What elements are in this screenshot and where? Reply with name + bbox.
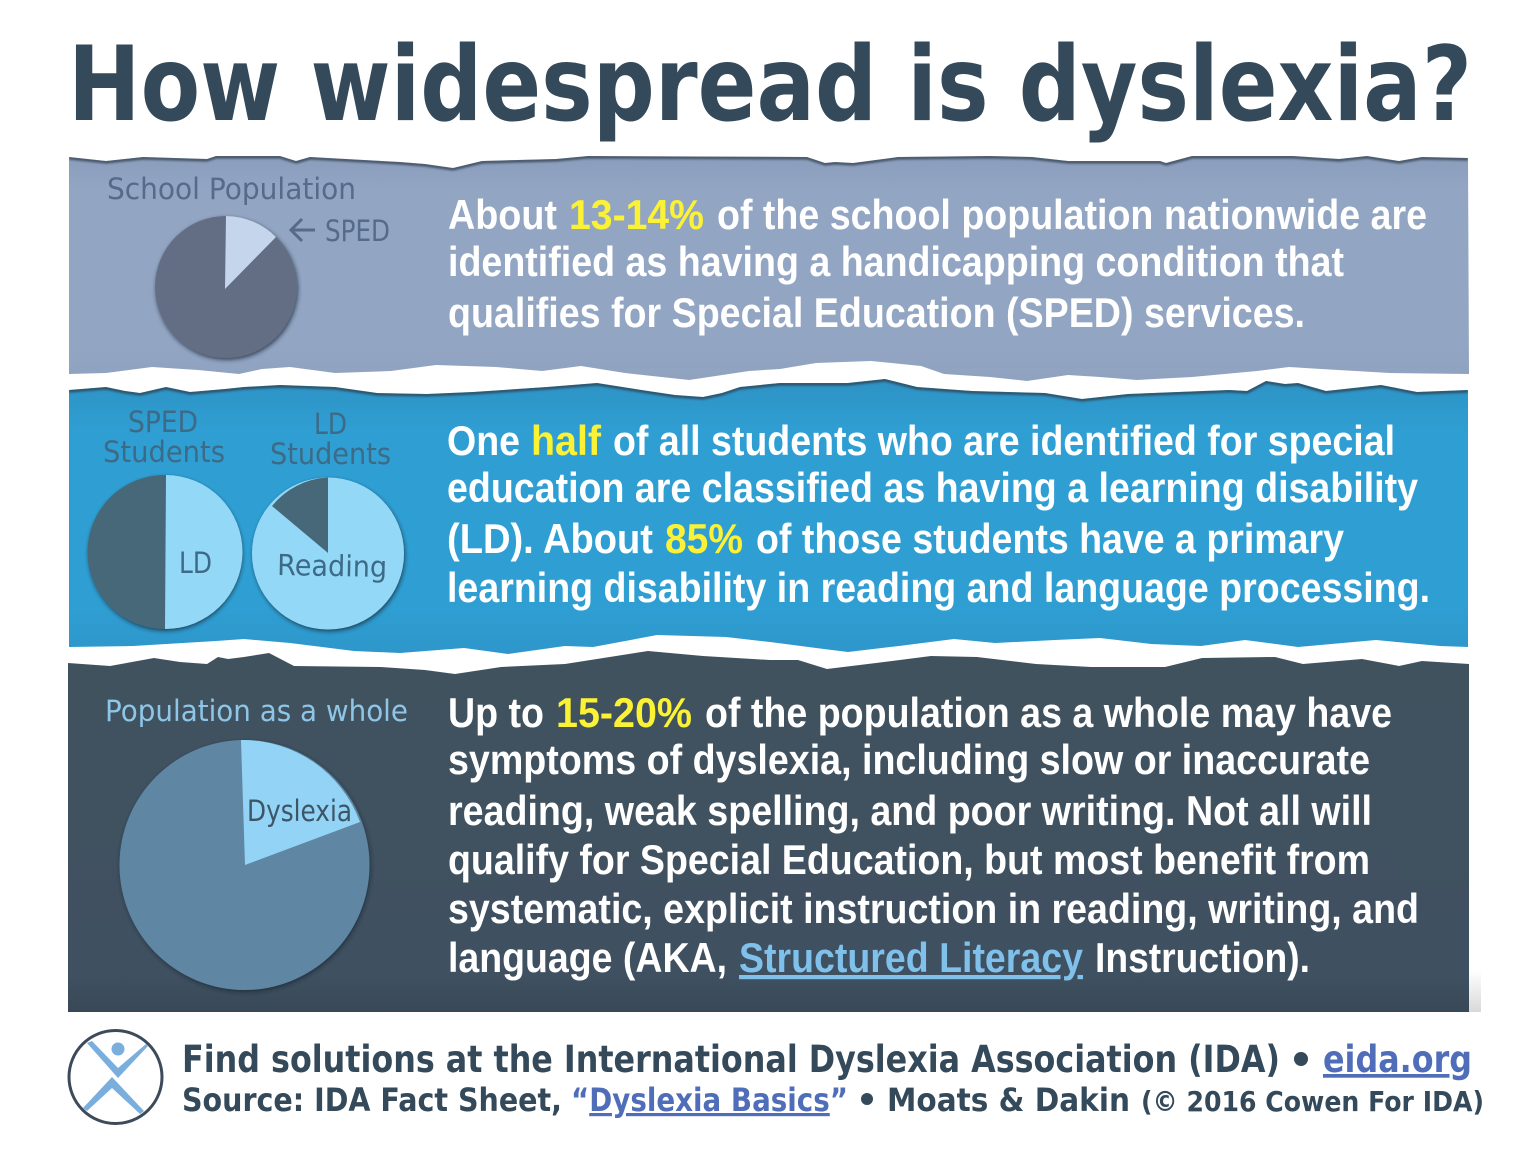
pie chart: SPED students xyxy=(88,475,243,629)
text block: dyslexia statistic: of the population as a whole may have xyxy=(705,689,1392,736)
text block: SPED statistic: qualifies for Special Education (SPED) services. xyxy=(448,289,1305,336)
text block: LD statistic: learning disability in reading and language processing. xyxy=(447,564,1430,611)
icon: IDA logo xyxy=(69,1030,162,1124)
text block: SPED statistic: of the school population nationwide are xyxy=(717,191,1427,238)
footer line 1: find solutions: eida.org xyxy=(1323,1038,1472,1081)
text block: SPED statistic: 13-14% xyxy=(569,191,704,238)
text block: dyslexia statistic: systematic, explicit instruction in reading, writing, and xyxy=(448,885,1419,932)
text block: dyslexia statistic: Up to xyxy=(448,689,544,736)
text block: SPED statistic: About xyxy=(448,191,557,238)
panel: SPED and LD students xyxy=(69,379,1468,654)
pie chart: school population xyxy=(155,216,297,358)
footer line 2: source and credits: Source: IDA Fact Sheet, xyxy=(182,1081,562,1119)
text block: dyslexia statistic: Instruction). xyxy=(1095,934,1310,981)
text block: LD statistic: One xyxy=(447,417,520,464)
panel background: blue torn paper xyxy=(69,379,1468,654)
text block: dyslexia statistic: symptoms of dyslexia, including slow or inaccurate xyxy=(448,736,1370,783)
label: LD students: LD xyxy=(314,407,347,441)
footer line 2: source and credits: “Dyslexia Basics” xyxy=(571,1081,848,1119)
label: dyslexia slice: Dyslexia xyxy=(247,794,352,828)
panel: school population xyxy=(69,156,1469,381)
footer xyxy=(69,1030,1484,1124)
label: population as a whole: Population as a whole xyxy=(105,694,408,728)
text block: dyslexia statistic xyxy=(448,689,1419,981)
arrow to SPED slice xyxy=(291,219,315,241)
footer line 2: source and credits: Moats & Dakin xyxy=(887,1081,1130,1119)
panel background: dark slate torn paper xyxy=(68,651,1469,1012)
text block: LD statistic: of all students who are identified for special xyxy=(613,417,1395,464)
text block: LD statistic: (LD). About xyxy=(447,515,653,562)
panel: population as a whole xyxy=(68,651,1481,1012)
label: reading slice: Reading xyxy=(277,548,387,584)
pie chart: population xyxy=(120,740,370,990)
label: LD students: Students xyxy=(270,437,391,471)
text block: dyslexia statistic: 15-20% xyxy=(556,689,692,736)
footer line 1: find solutions: Find solutions at the International Dyslexia Association (IDA) xyxy=(182,1038,1280,1081)
footer line 2: source and credits xyxy=(182,1081,1484,1119)
text block: LD statistic: half xyxy=(531,417,602,464)
panel background: slate blue torn paper xyxy=(69,156,1469,381)
text block: SPED statistic: identified as having a handicapping condition that xyxy=(448,238,1344,285)
text block: dyslexia statistic: language (AKA, xyxy=(448,934,727,981)
label: SPED students: SPED xyxy=(128,405,198,439)
shadow at lower right of panel xyxy=(1469,970,1481,1012)
label: SPED: SPED xyxy=(325,214,390,248)
text block: SPED statistic xyxy=(448,191,1427,336)
label: LD slice: LD xyxy=(179,546,212,580)
label: SPED students xyxy=(103,405,225,469)
text block: LD statistic: 85% xyxy=(665,515,743,562)
text block: dyslexia statistic: qualify for Special Education, but most benefit from xyxy=(448,836,1370,883)
footer line 2: source and credits: (© 2016 Cowen For IDA) xyxy=(1141,1085,1484,1118)
text block: dyslexia statistic: reading, weak spelling, and poor writing. Not all will xyxy=(448,787,1372,834)
text block: dyslexia statistic: Structured Literacy xyxy=(739,934,1084,981)
label: SPED students: Students xyxy=(103,435,225,469)
text block: LD statistic: education are classified as having a learning disability xyxy=(447,464,1419,511)
text block: LD statistic: of those students have a primary xyxy=(756,515,1345,562)
text block: LD statistic xyxy=(447,417,1430,611)
label: LD students xyxy=(270,407,391,471)
pie chart: LD students xyxy=(252,478,404,630)
label: school population: School Population xyxy=(107,172,356,206)
